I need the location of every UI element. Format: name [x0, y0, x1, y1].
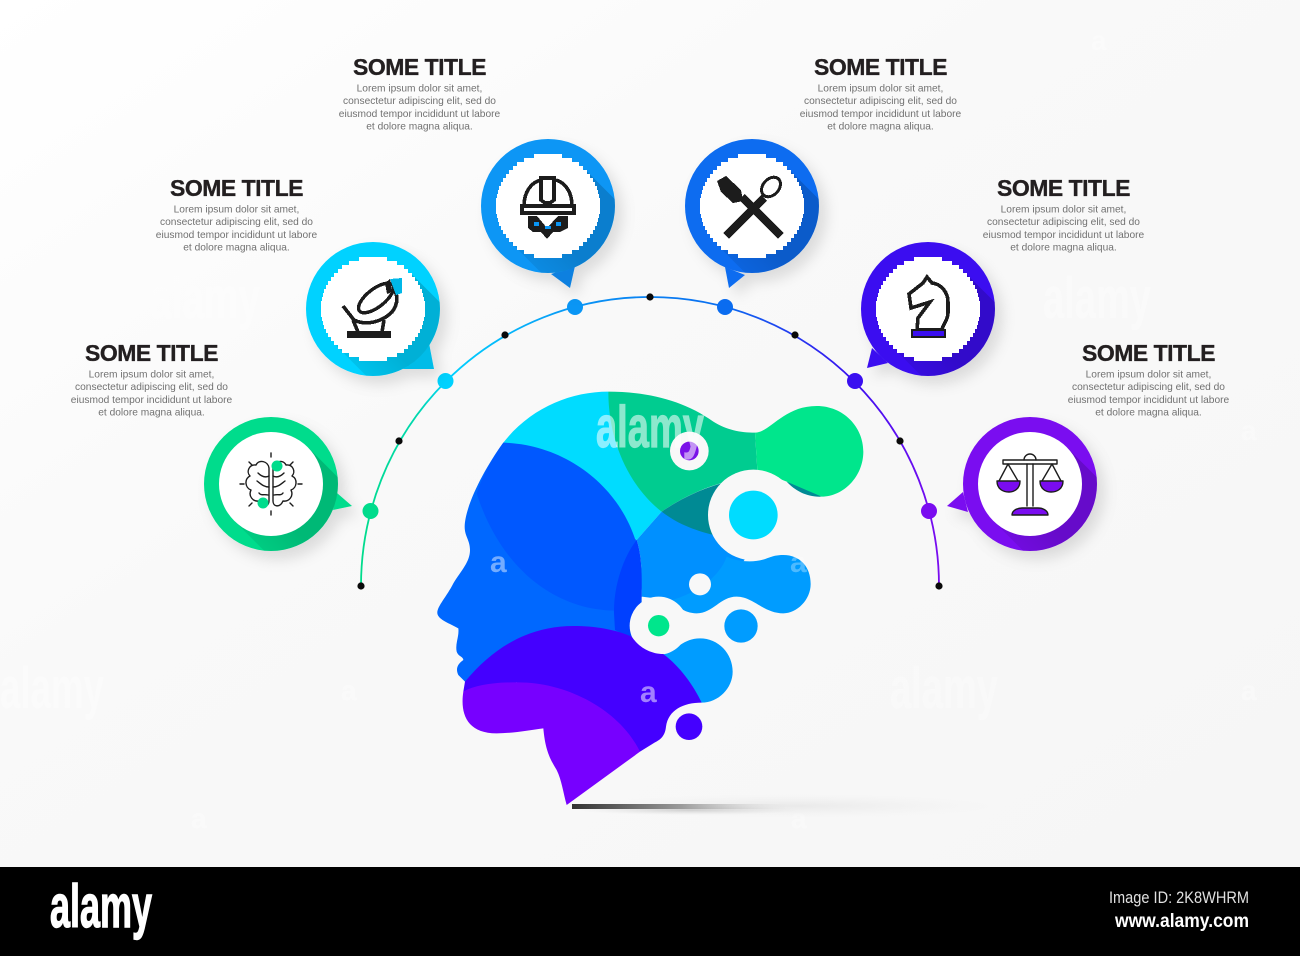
indigo dot: [676, 713, 702, 740]
head illustration: [437, 392, 863, 805]
text block: item 2: consectetur adipiscing elit, sed do: [160, 217, 313, 228]
text block: item 2: Lorem ipsum dolor sit amet,: [174, 204, 299, 216]
text block: item 3: Lorem ipsum dolor sit amet,: [357, 84, 482, 94]
text block: item 2: SOME TITLE: [170, 175, 303, 201]
faint background watermarks: a: [791, 803, 807, 834]
text block: item 3: consectetur adipiscing elit, sed do: [343, 96, 496, 107]
faint background watermarks: alamy: [0, 656, 104, 721]
watermark on head: alamy: [596, 395, 704, 460]
floating blue dot: [724, 609, 758, 643]
text block: item 1: SOME TITLE: [85, 340, 218, 366]
text block: item 6: Lorem ipsum dolor sit amet,: [1086, 370, 1211, 380]
bubble 1: green, brain: [204, 417, 352, 551]
text block: item 5: SOME TITLE: [997, 175, 1130, 201]
text block: item 1: consectetur adipiscing elit, sed do: [75, 382, 228, 393]
text block: item 4: [800, 54, 962, 133]
text block: item 1: [71, 340, 233, 419]
teal sliver: [787, 482, 822, 497]
text block: item 6: eiusmod tempor incididunt ut labore: [1068, 395, 1230, 406]
white dot in blue lobe: [689, 573, 711, 595]
teal overlap: [662, 481, 730, 535]
text block: item 3: [339, 54, 501, 133]
black arc dots: [357, 293, 943, 590]
bubble 4: blue, cutlery: [685, 139, 819, 288]
text block: item 4: eiusmod tempor incididunt ut labore: [800, 109, 962, 120]
icon: helmet: [522, 178, 574, 239]
text block: item 6: et dolore magna aliqua.: [1095, 408, 1202, 419]
text block: item 5: [983, 175, 1145, 254]
text block: item 3: et dolore magna aliqua.: [366, 122, 473, 133]
text block: item 4: Lorem ipsum dolor sit amet,: [818, 84, 943, 94]
icon: brain: [240, 453, 302, 515]
bubble 2: cyan, dish: [306, 242, 440, 376]
faint background watermarks: alamy: [890, 656, 998, 721]
dark green region: [608, 392, 757, 512]
image id: Image ID: 2K8WHRM: [1109, 888, 1249, 907]
text block: item 6: SOME TITLE: [1082, 340, 1215, 366]
overlap dark blue: [614, 540, 642, 638]
watermark on head: a: [490, 546, 507, 579]
text block: item 4: consectetur adipiscing elit, sed do: [804, 96, 957, 107]
footer bar: [0, 867, 1300, 956]
text block: item 6: consectetur adipiscing elit, sed do: [1072, 382, 1225, 393]
faint background watermarks: a: [1241, 675, 1257, 706]
text block: item 4: et dolore magna aliqua.: [827, 122, 934, 133]
lower blue lobe: [663, 638, 733, 703]
sky blue mid region: [637, 512, 753, 601]
bubble 3: blue, helmet: [481, 139, 615, 288]
icon: chess knight: [909, 277, 948, 337]
white ring with cyan circle: [708, 470, 799, 560]
faint background watermarks: a: [1091, 25, 1107, 56]
watermark on head: [490, 395, 807, 709]
bubble 6: violet, scales: [947, 417, 1097, 551]
faint background watermarks: a: [341, 675, 357, 706]
purple neck band: [463, 626, 702, 752]
text block: item 2: et dolore magna aliqua.: [183, 243, 290, 254]
bright green lobe: [755, 406, 863, 497]
faint background watermarks: alamy: [1043, 266, 1151, 331]
head base: [437, 443, 643, 682]
site url: www.alamy.com: [1114, 911, 1249, 932]
violet neck: [463, 682, 640, 805]
text block: item 5: eiusmod tempor incididunt ut labore: [983, 230, 1145, 241]
lower white ring with green dot: [630, 597, 688, 655]
ringed purple dot: [670, 432, 709, 470]
text block: item 3: eiusmod tempor incididunt ut labore: [339, 109, 501, 120]
coloured arc nodes: [362, 299, 937, 519]
text block: item 5: et dolore magna aliqua.: [1010, 243, 1117, 254]
watermark on head: a: [790, 546, 807, 579]
text block: item 5: consectetur adipiscing elit, sed do: [987, 217, 1140, 228]
text block: item 1: et dolore magna aliqua.: [98, 408, 205, 419]
ground shadow beneath head: [572, 794, 990, 818]
text block: item 2: eiusmod tempor incididunt ut labore: [156, 230, 318, 241]
icon: crossed cutlery: [717, 173, 784, 236]
right blue lobe: [670, 555, 811, 613]
text block: item 4: SOME TITLE: [814, 54, 947, 80]
footer logo: alamy: [50, 873, 152, 940]
bubble 5: indigo, knight: [861, 242, 995, 376]
watermark on head: a: [640, 676, 657, 709]
text block: item 5: Lorem ipsum dolor sit amet,: [1001, 204, 1126, 216]
icon: scales: [997, 454, 1063, 515]
text block: item 1: eiusmod tempor incididunt ut labore: [71, 395, 233, 406]
faint background watermarks: alamy: [150, 266, 260, 331]
front brain circle: [477, 443, 642, 611]
arc timeline: [357, 293, 943, 590]
text block: item 1: Lorem ipsum dolor sit amet,: [89, 370, 214, 380]
text block: item 2: [156, 175, 318, 254]
faint background watermarks: a: [191, 803, 207, 834]
faint background watermarks: a: [1241, 415, 1257, 446]
icon: satellite dish: [343, 278, 402, 338]
crown cyan: [503, 392, 662, 540]
text block: item 6: [1068, 340, 1230, 419]
text block: item 3: SOME TITLE: [353, 54, 486, 80]
